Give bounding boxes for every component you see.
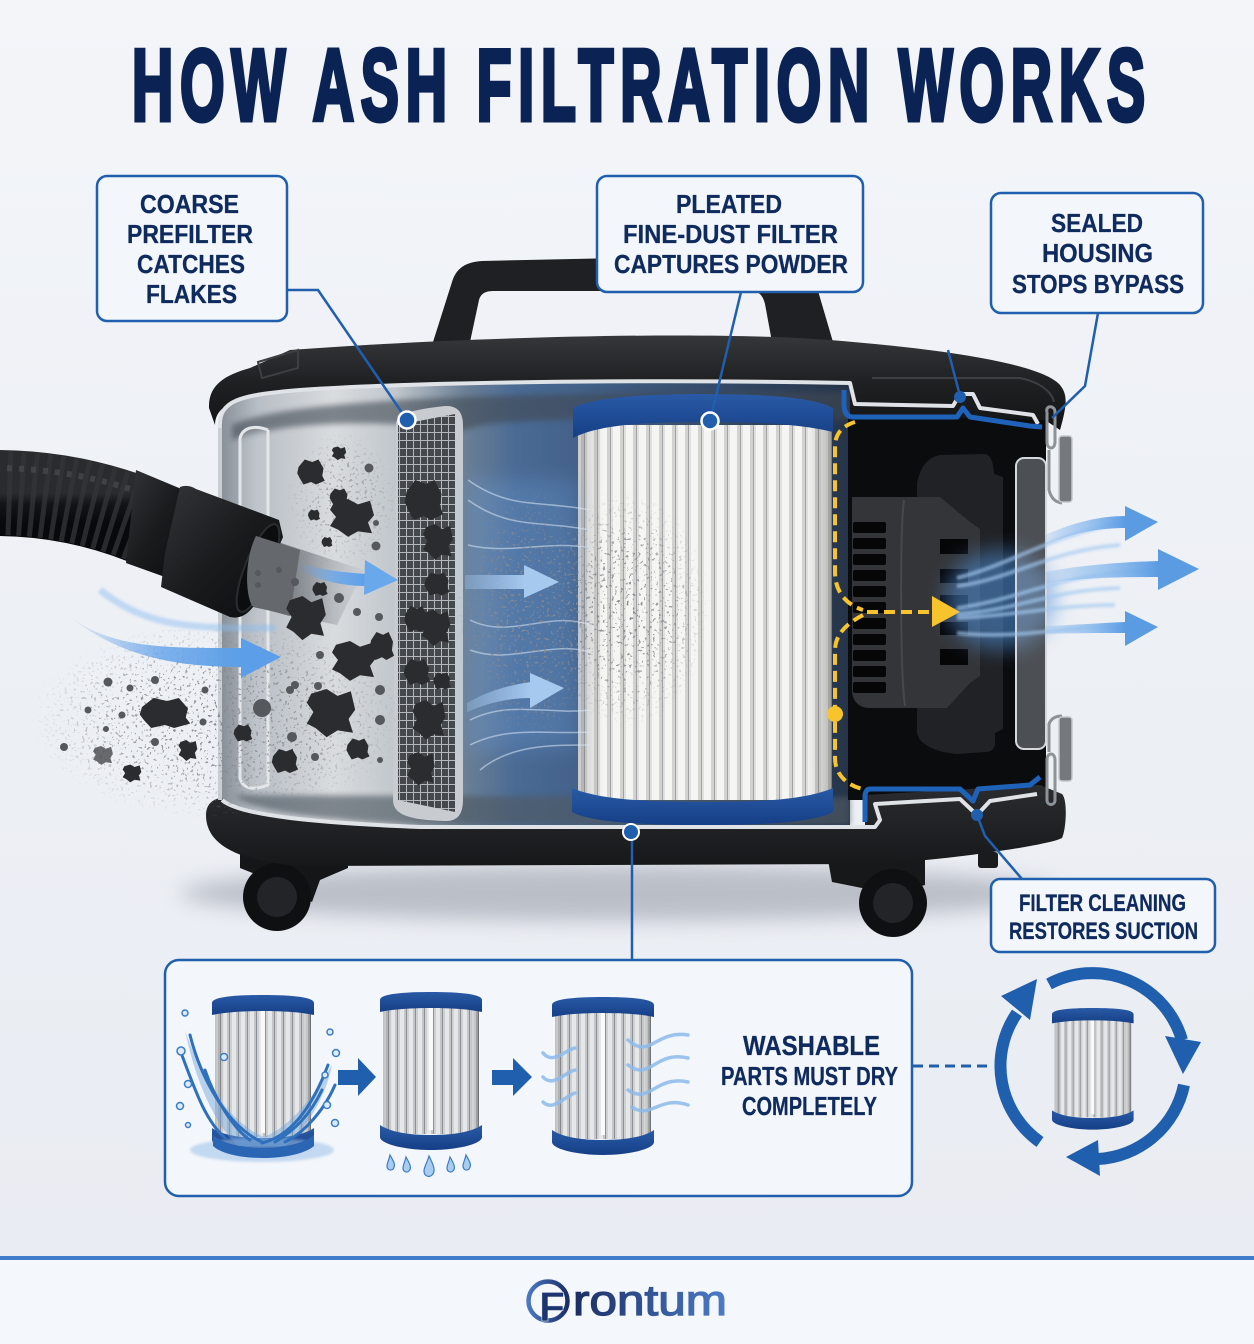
callout: filter cleaning restores suction: RESTORES SUCTION: [1009, 918, 1198, 945]
callout: coarse prefilter: [97, 176, 416, 428]
logo: rontum: [573, 1277, 727, 1325]
title: HOW ASH FILTRATION WORKS: [132, 30, 1145, 142]
dashed connector to cycle: [913, 1064, 992, 1068]
motor fan housing: [852, 497, 980, 708]
callout: pleated fine-dust filter: FINE-DUST FILTER: [623, 219, 838, 249]
callout: pleated fine-dust filter: [597, 176, 863, 430]
panel text: WASHABLE: [743, 1030, 880, 1061]
left window frame: [240, 427, 268, 788]
filter being washed: [176, 995, 340, 1162]
blue housing seals: [844, 390, 1042, 822]
hose nozzle: [250, 533, 364, 625]
airflow glow in the mid chamber: [455, 480, 600, 770]
callout: filter cleaning restores suction: [971, 809, 1215, 952]
filter drying with warm air waves: [543, 997, 688, 1155]
airflow arrows: intake: [65, 560, 398, 678]
airflow arrows: exhaust: [957, 506, 1199, 646]
callout: pleated fine-dust filter: CAPTURES POWDER: [614, 249, 848, 279]
silver rims: [220, 381, 1038, 827]
vacuum hose with coupling and nozzle: [0, 468, 364, 625]
logo: [528, 1277, 727, 1330]
filter top cap: [573, 394, 833, 438]
footer: [0, 1256, 1254, 1344]
airflow path: yellow dashed: [827, 422, 960, 789]
callout: coarse prefilter: COARSE: [140, 189, 239, 219]
pleated fine-dust filter: [540, 394, 833, 825]
panel: washable parts must dry: [165, 960, 912, 1196]
floor shadow: [180, 865, 1060, 921]
panel text: COMPLETELY: [742, 1091, 877, 1121]
lid: [209, 335, 1066, 430]
arrow: drip to dry: [492, 1058, 532, 1096]
arrow: wash to drip: [338, 1058, 376, 1096]
filter bottom cap: [572, 788, 833, 825]
exhaust glow: [945, 550, 1055, 650]
nozzle root: [247, 536, 300, 616]
motor back plate: [917, 454, 1003, 754]
callout: pleated fine-dust filter: PLEATED: [676, 189, 782, 219]
motor housing divider: [901, 500, 905, 706]
tank interior: [220, 381, 850, 827]
exhaust window: [1016, 458, 1046, 749]
fine dust cloud: [30, 430, 410, 820]
callout: coarse prefilter: PREFILTER: [127, 219, 253, 249]
water splash crown: [185, 1030, 332, 1146]
panel text: [721, 1030, 898, 1121]
rear wheels and forks: [240, 850, 998, 937]
fine dust in mid chamber: [455, 480, 600, 750]
callout: sealed housing: HOUSING: [1042, 238, 1153, 268]
callout: coarse prefilter: FLAKES: [146, 279, 237, 309]
ash rocks: [93, 446, 453, 786]
panel text: PARTS MUST DRY: [721, 1061, 898, 1091]
captured powder on filter: [540, 490, 710, 730]
callout: coarse prefilter: CATCHES: [137, 249, 245, 279]
hose collar: [126, 470, 191, 577]
callout: sealed housing: STOPS BYPASS: [1012, 269, 1184, 299]
tank inner bottom shading: [235, 795, 850, 825]
coarse prefilter mesh: [393, 406, 463, 821]
filter dripping: [380, 992, 482, 1176]
callout: sealed housing: [948, 193, 1203, 418]
callout: sealed housing: SEALED: [1051, 208, 1143, 238]
handle: [433, 258, 833, 342]
hose coupling: [161, 486, 283, 618]
motor vents: [853, 522, 968, 693]
cycle icon with mini filter: [1000, 973, 1201, 1176]
coupling end ring: [228, 520, 288, 616]
logo: F: [539, 1283, 565, 1330]
lid detail: [258, 350, 1054, 402]
callout: filter cleaning restores suction: FILTER CLEANING: [1019, 890, 1186, 917]
airflow arrows: mid chamber: [465, 565, 564, 712]
tank inner top shading: [232, 392, 850, 440]
motor compartment: [848, 415, 1046, 800]
base: [206, 785, 1066, 866]
vacuum machine cross-section: [206, 258, 1072, 937]
latches: [1047, 407, 1072, 804]
connector from filter to wash panel: [623, 824, 639, 960]
